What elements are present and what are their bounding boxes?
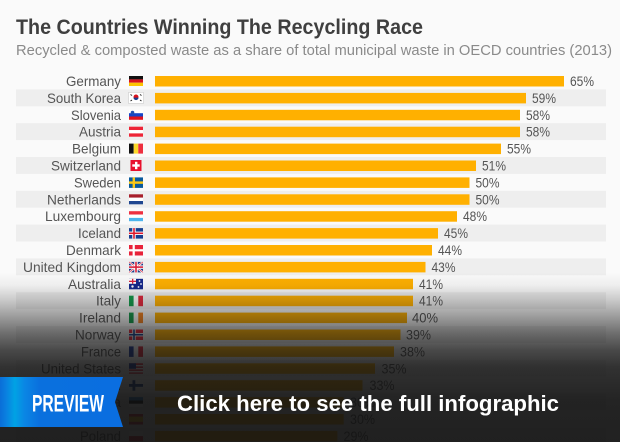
row: South Korea <box>16 89 606 106</box>
row: Belgium: Belgium <box>72 141 121 157</box>
row: Finland: 33% <box>370 377 394 393</box>
row: Denmark <box>66 242 462 258</box>
row: Estonia: 30% <box>350 394 375 410</box>
row: Netherlands: Netherlands <box>47 191 121 207</box>
row: South Korea: South Korea <box>47 90 121 106</box>
row: United States: 35% <box>382 360 406 376</box>
row: Norway <box>16 326 606 343</box>
row: Netherlands <box>16 191 606 208</box>
row: Switzerland: 51% <box>482 158 506 174</box>
row: Belgium <box>72 141 531 157</box>
row: France: France <box>81 343 121 359</box>
row: Italy <box>16 292 606 309</box>
row: Iceland: 45% <box>444 225 468 241</box>
row: Ireland <box>79 310 438 326</box>
row: Iceland: Iceland <box>78 225 121 241</box>
row: Finland: Finland <box>74 377 121 393</box>
row: Slovenia: 58% <box>526 107 550 123</box>
row: Luxembourg: 48% <box>463 208 487 224</box>
row: Germany <box>66 73 594 89</box>
preview label: PREVIEW <box>32 390 105 418</box>
row: Luxembourg <box>45 208 487 224</box>
subtitle: Recycled & composted waste as a share of total municipal waste in OECD countries (2013) <box>16 42 612 59</box>
row: Slovenia: Slovenia <box>71 107 121 123</box>
row: Spain: Spain <box>85 411 121 427</box>
row: France: 38% <box>400 343 425 359</box>
row: South Korea: 59% <box>532 90 556 106</box>
title: The Countries Winning The Recycling Race <box>16 15 423 39</box>
row: Sweden: 50% <box>476 174 500 190</box>
row: Belgium: 55% <box>507 141 531 157</box>
row: Slovenia <box>71 107 550 123</box>
row: Denmark: 44% <box>438 242 462 258</box>
row: Sweden: Sweden <box>74 174 121 190</box>
row: United States: United States <box>41 360 121 376</box>
row: United Kingdom <box>16 258 606 275</box>
row: Switzerland <box>16 157 606 174</box>
row: United Kingdom: United Kingdom <box>23 259 121 275</box>
dark gradient overlay <box>0 272 620 442</box>
row: Luxembourg: Luxembourg <box>45 208 121 224</box>
call to action: Click here to see the full infographic <box>177 391 559 416</box>
row: Italy: 41% <box>419 293 443 309</box>
row: Austria <box>16 123 606 140</box>
row: Estonia <box>16 394 606 410</box>
row: Spain: 30% <box>350 411 375 427</box>
row: Spain <box>85 411 375 427</box>
row: Australia: Australia <box>68 276 121 292</box>
preview ribbon <box>0 377 123 427</box>
row: Italy: Italy <box>96 293 121 309</box>
row: Ireland: Ireland <box>79 310 121 326</box>
row: Switzerland: Switzerland <box>51 158 121 174</box>
row: United Kingdom: 43% <box>432 259 456 275</box>
row: Norway: 39% <box>406 326 431 342</box>
row: Germany: 65% <box>570 73 594 89</box>
row: Iceland <box>16 225 606 242</box>
row: Poland <box>16 427 606 442</box>
bar chart <box>16 73 606 442</box>
row: Estonia: Estonia <box>72 394 121 410</box>
row: Norway: Norway <box>75 326 121 342</box>
row: Australia <box>68 276 443 292</box>
row: Germany: Germany <box>66 73 121 89</box>
row: France <box>81 343 425 359</box>
row: Sweden <box>74 174 500 190</box>
row: Austria: Austria <box>79 124 121 140</box>
row: Netherlands: 50% <box>476 191 500 207</box>
row: Finland <box>74 377 394 393</box>
row: United States <box>16 360 606 377</box>
row: Austria: 58% <box>526 124 550 140</box>
row: Denmark: Denmark <box>66 242 122 258</box>
row: Ireland: 40% <box>412 310 438 326</box>
row: Australia: 41% <box>419 276 443 292</box>
